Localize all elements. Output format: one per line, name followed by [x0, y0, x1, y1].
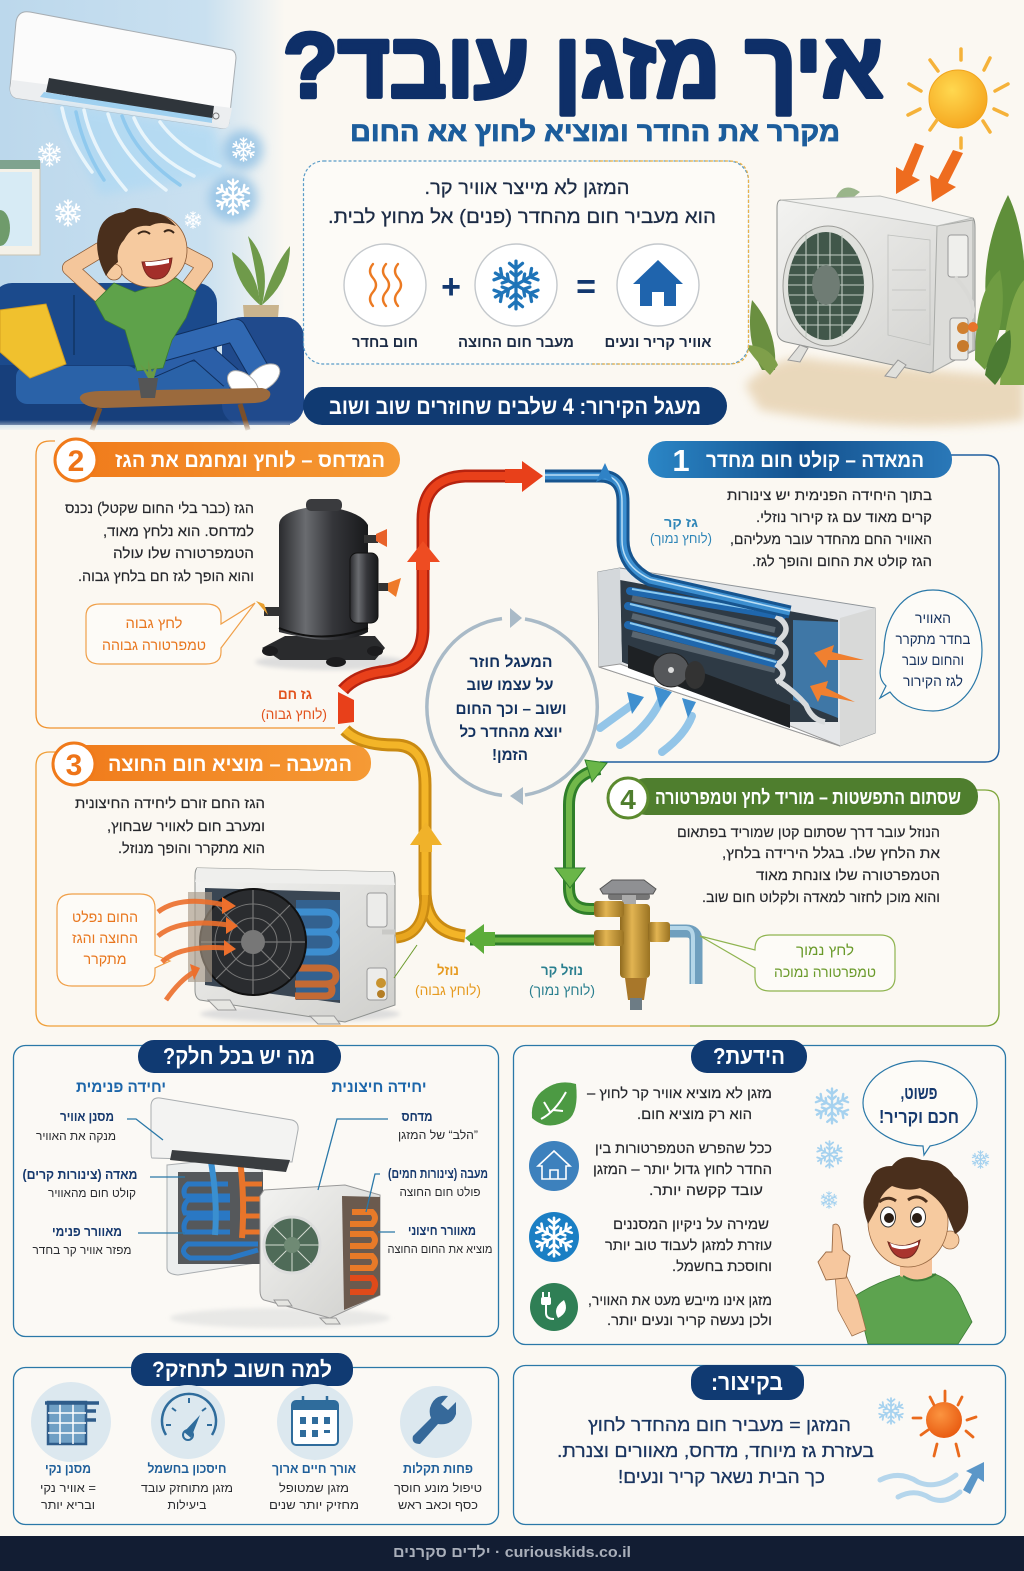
labels under icons: [352, 334, 712, 351]
fact 1: מזגן לא מוציא אוויר קר לחוץ –: [587, 1085, 772, 1102]
panel: what is in each part: [14, 1040, 498, 1336]
labels: indoor unit: מנקה את האוויר: [36, 1129, 116, 1143]
labels under icons: מעבר חום החוצה: [458, 334, 574, 351]
text: step 3 body: ומערב חום לאוויר שבחוץ,: [107, 818, 265, 835]
fact 1: [532, 1082, 772, 1126]
text: key statement: הוא מעביר חום מהחדר (פנים) אל מחוץ לבית.: [328, 207, 716, 228]
fact 1: הוא רק מוציא חום.: [637, 1107, 752, 1123]
text: step 1 body: הגז קולט את החום והופך לגז.: [752, 553, 932, 570]
panel: summary: [514, 1365, 1006, 1524]
label: hot gas: (לוחץ גבוה): [261, 706, 327, 722]
callout: low pressure: [700, 935, 895, 991]
panel: step 3 condenser: [36, 743, 690, 1026]
labels: indoor unit: יחידה פנימית: [76, 1079, 166, 1096]
heading: [691, 1040, 807, 1073]
title: איך מזגן עובד?: [283, 15, 883, 117]
fact 4: ולכן נעשה קריר ונעים יותר.: [607, 1312, 772, 1329]
text: step 4 body: הנוזל עובר דרך שסתום קטן שמוריד בפתאום: [677, 824, 940, 841]
text: step 1 body: קרים מאוד עם גז קירור נוזלי.: [756, 509, 932, 526]
cold air streams: [52, 102, 228, 195]
header: step 1: המאדה – קולט חום מחדר: [706, 449, 924, 472]
callout: simple smart cool: פשוט,: [900, 1083, 938, 1103]
header: step 3: [53, 743, 371, 785]
fact 3: [529, 1212, 772, 1275]
text: step 3 body: הגז החם זורם ליחידה החיצונית: [75, 795, 265, 812]
item: clean filter: ובריא יותר: [41, 1498, 95, 1512]
text: cycle note: ושוב – וכך החום: [456, 701, 566, 718]
fact 3: שמירה על ניקיון המסננים: [613, 1216, 769, 1233]
callout: room air: [880, 590, 982, 711]
labels: outdoor unit: מאוורר חיצוני: [408, 1223, 476, 1238]
header: step 3: 3: [66, 749, 82, 782]
labels: outdoor unit: מדחס: [402, 1109, 432, 1124]
text: summary: בעזרת גז מיוחד, מדחס, מאוורים וצנרת.: [557, 1441, 874, 1461]
header: step 1: [648, 441, 952, 478]
heading: בקיצור:: [711, 1369, 783, 1395]
table: [80, 360, 270, 430]
header: step 1: 1: [672, 443, 690, 478]
text: summary: המזגן = מעביר חום מהחדר לחוץ: [588, 1415, 851, 1435]
text: step 1 body: בתוך היחידה הפנימית יש צינורות: [727, 488, 932, 504]
heading: מה יש בכל חלק?: [163, 1043, 315, 1069]
footer: curiouskids.co.il · ילדים סקרנים: [393, 1544, 631, 1561]
item: fewer faults: פחות תקלות: [403, 1461, 473, 1476]
labels: indoor unit: מפזר אוויר קר בחדר: [32, 1243, 132, 1257]
footer: [0, 1536, 1024, 1571]
text: step 2 body: למדחס. הוא נלחץ מאוד,: [103, 523, 254, 540]
fact 2: [529, 1140, 772, 1199]
illustration: pointing boy: [818, 1157, 972, 1344]
arrow: hot red pipe: [338, 461, 543, 724]
item: clean filter: = אוויר נקי: [40, 1481, 96, 1495]
icon: sun and airflow: [878, 1391, 984, 1500]
snowflakes in room: [38, 130, 263, 228]
label: cold liquid: [529, 962, 595, 998]
fact 4: מזגן אינו מייבש מעט את האוויר,: [588, 1293, 772, 1309]
header: step 2: 2: [68, 445, 84, 478]
text: step 2 body: הגז (כבר בלי החום שקטל) נכנס: [65, 500, 254, 517]
illustration: split AC parts: [127, 1098, 395, 1328]
labels: indoor unit: קולט חום מהאוויר: [48, 1186, 136, 1200]
text: step 4 body: את הלחץ שלו. בגלל הירידה בלחץ,: [722, 845, 940, 862]
illustration: living room with boy relaxing: [0, 0, 310, 432]
icon: sun: [908, 49, 1008, 148]
item: save electricity: חיסכון בחשמל: [148, 1461, 226, 1476]
subtitle: מקרר את החדר ומוציא לחוץ אא החום: [350, 117, 840, 147]
text: step 3 body: [75, 795, 265, 857]
panel: key idea: [304, 161, 748, 364]
label: hot gas: [261, 686, 327, 722]
labels: indoor unit: מאדה (צינורות קרים): [22, 1167, 138, 1182]
icon: cool house: [617, 244, 699, 326]
callout: room air: האוויר: [915, 611, 951, 627]
text: key statement: המזגן לא מייצר אוויר קר.: [424, 178, 630, 199]
illustration: outdoor unit cutaway: [158, 868, 417, 1024]
header: step 3: המעבה – מוציא חום החוצה: [108, 753, 352, 776]
heading: [138, 1040, 341, 1073]
text: cycle note: [456, 654, 566, 764]
text: cycle note: המעגל חוזר: [470, 654, 552, 671]
text: step 4 body: [677, 824, 940, 906]
fact 3: עוזרת למזגן לעבוד טוב יותר: [605, 1237, 772, 1254]
callout: low pressure: טמפרטורה נמוכה: [774, 965, 876, 981]
text: cycle note: יוצא מהחדר כל: [460, 724, 562, 741]
callout: room air: והחום עובר: [902, 653, 964, 669]
text: summary: כך הבית נשאר קריר ונעים!: [618, 1467, 825, 1487]
fact 2: ככל שהפרש הטמפרטורות בין: [595, 1140, 772, 1157]
label: cold liquid: (לוחץ נמוך): [529, 982, 595, 998]
item: clean filter: [31, 1382, 111, 1512]
label: hot gas: גז חם: [278, 686, 312, 702]
callout: high pressure: לחץ גבוה: [126, 615, 182, 632]
item: fewer faults: [394, 1386, 482, 1512]
cycle circle: [427, 608, 597, 805]
labels: outdoor unit: פולט חום החוצה: [400, 1185, 480, 1199]
item: save electricity: מזגן מתוחזק עובד: [141, 1481, 233, 1495]
banner: cooling cycle: [303, 387, 727, 425]
couch: [0, 283, 304, 425]
callout: heat released: מתקרר: [84, 952, 126, 968]
callout: heat released: החוצה והגז: [72, 931, 138, 947]
label: cold gas: [650, 515, 712, 546]
text: step 2 body: הטמפרטורה שלו עולה: [113, 545, 254, 562]
panel: step 4 expansion valve: [529, 778, 999, 1026]
header: step 4: [608, 778, 978, 818]
labels: outdoor unit: מעבה (צינורות חמים): [388, 1166, 488, 1181]
callout: heat released: [57, 894, 170, 986]
labels: indoor unit: מאוורר פנימי: [52, 1224, 122, 1239]
window: [0, 160, 40, 255]
item: fewer faults: כסף וכאב ראש: [398, 1498, 478, 1512]
text: summary: [557, 1415, 874, 1487]
arrows: sun heat: [896, 143, 963, 202]
panel: step 2 compressor: [36, 439, 405, 728]
label: cold gas: (לוחץ נמוך): [650, 531, 712, 546]
text: key statement: [328, 178, 716, 228]
text: step 1 body: [727, 488, 932, 570]
heading: [131, 1353, 353, 1386]
icon: heat in room: [344, 244, 426, 326]
fact 2: עובד קקשה יותר.: [649, 1183, 763, 1199]
icon: indoor air conditioner: [10, 12, 236, 128]
text: step 2 body: והוא הופך לגז חם בלחץ גבוה.: [78, 568, 254, 585]
labels under icons: חום בחדר: [352, 334, 418, 351]
callout: room air: לגז הקירור: [903, 673, 963, 690]
heading: הידעת?: [713, 1043, 785, 1069]
fact 4: [530, 1283, 772, 1331]
label: cold liquid: נוזל קר: [541, 962, 583, 978]
item: save electricity: [141, 1385, 233, 1512]
icon: plus: +: [441, 268, 461, 306]
illustration: indoor unit cutaway: [598, 568, 875, 752]
arrow: yellow pipe: [345, 730, 465, 938]
labels: indoor unit: מסנן אוויר: [60, 1109, 114, 1124]
callout: heat released: החום נפלט: [72, 909, 138, 926]
callout: simple smart cool: [863, 1061, 977, 1155]
icon: equals: =: [576, 268, 596, 306]
fact 3: וחוסכת בחשמל.: [672, 1258, 772, 1275]
heading: למה חשוב לתחזק?: [152, 1357, 332, 1382]
illustration: expansion valve: [594, 880, 696, 1010]
snowflakes: [815, 1089, 989, 1208]
label: liquid high pressure: [415, 962, 481, 998]
callout: room air: בחדר מתקרר: [896, 632, 971, 648]
text: cycle note: על עצמו שוב: [466, 677, 554, 694]
text: cycle note: הזמן!: [492, 747, 528, 764]
header: step 2: המדחס – לוחץ ומחמם את הגז: [115, 449, 385, 472]
labels: outdoor unit: ”הלב“ של המזגן: [398, 1128, 478, 1142]
arrow: blue pipe: [545, 463, 790, 612]
labels: outdoor unit: יחידה חיצונית: [332, 1079, 426, 1096]
icon: snowflake transfer: [475, 244, 557, 326]
labels: indoor unit: [22, 1079, 166, 1257]
item: fewer faults: טיפול מונע חוסך: [394, 1481, 482, 1495]
panel: why maintain: [14, 1353, 498, 1524]
panel: did you know: [514, 1040, 1006, 1344]
banner: cooling cycle: מעגל הקירור: 4 שלבים שחוזרים שוב ושוב: [329, 394, 701, 419]
illustration: compressor: [255, 499, 405, 670]
text: step 4 body: והוא מוכן לחזור למאדה ולקלוט חום שוב.: [702, 889, 940, 906]
illustration: outdoor unit in garden: [745, 188, 1024, 426]
text: step 1 body: האוויר החם מהחדר עובר מעליהם,: [730, 531, 932, 548]
text: step 3 body: הוא מתקרר והופך מנוזל.: [118, 840, 265, 857]
header: step 2: [55, 439, 400, 481]
item: long life: מזגן שמטופל: [279, 1481, 349, 1495]
pillow: [0, 304, 66, 378]
label: liquid high pressure: (לוחץ גבוה): [415, 982, 481, 998]
arrow: green pipes: [465, 760, 607, 954]
item: clean filter: מסנן נקי: [45, 1461, 91, 1476]
item: long life: [269, 1384, 359, 1512]
text: step 2 body: [65, 500, 254, 585]
item: save electricity: ביעילות: [168, 1498, 206, 1512]
panel: step 1 evaporator: [598, 441, 999, 762]
labels: outdoor unit: מוציא את החום החוצה: [388, 1242, 492, 1256]
text: step 4 body: הטמפרטורה שלו צונחת מאוד: [756, 867, 940, 884]
callout: low pressure: לחץ נמוך: [796, 942, 854, 959]
fact 2: החדר לחוץ גדול יותר – המזגן: [593, 1161, 772, 1178]
labels under icons: אוויר קריר ונעים: [604, 334, 712, 351]
plant: [232, 236, 290, 343]
label: cold gas: גז קר: [664, 515, 699, 530]
label: liquid high pressure: נוזל: [437, 962, 459, 978]
callout: high pressure: טמפרטורה גבוהה: [102, 638, 206, 654]
labels: outdoor unit: [332, 1079, 492, 1256]
header: step 4: 4: [620, 784, 636, 815]
heading: [691, 1365, 804, 1400]
item: long life: מחזיק יותר שנים: [269, 1498, 359, 1512]
callout: simple smart cool: חכם וקריר!: [879, 1107, 959, 1127]
boy: [70, 208, 285, 405]
item: long life: אורך חיים ארוך: [272, 1461, 356, 1476]
callout: high pressure: [86, 603, 255, 664]
